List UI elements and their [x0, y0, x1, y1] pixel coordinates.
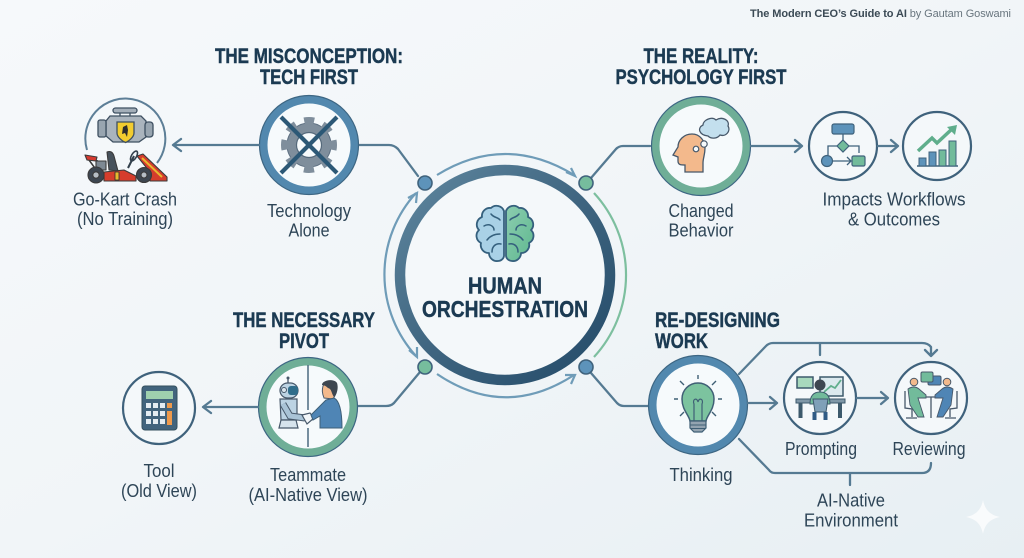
label — [804, 490, 898, 530]
label: (AI-Native View) — [248, 484, 368, 505]
orbit arrow: top — [437, 154, 574, 175]
junction node: top right — [579, 176, 593, 190]
label: Alone — [288, 220, 330, 240]
heading: PSYCHOLOGY FIRST — [616, 66, 787, 89]
icon: head with thought — [652, 96, 750, 196]
label: (Old View) — [121, 480, 197, 501]
credit line: The Modern CEO’s Guide to AI by Gautam Goswami — [750, 8, 1011, 20]
heading: RE-DESIGNING — [655, 309, 780, 332]
label: Changed — [668, 200, 734, 221]
arrow: to outcomes — [878, 140, 898, 152]
label: AI-Native — [817, 490, 885, 510]
label: Technology — [267, 200, 352, 221]
icon: robot and human handshake — [258, 358, 358, 456]
hub title line two: ORCHESTRATION — [422, 296, 588, 322]
orbit arrow: left down head — [409, 347, 417, 357]
junction node: top left — [418, 176, 432, 190]
label: Environment — [804, 510, 898, 530]
label: (No Training) — [77, 208, 173, 229]
icon: calculator — [123, 372, 195, 444]
junction node: bottom left — [418, 360, 432, 374]
icon: corner sparkle — [966, 500, 1000, 534]
icon: crossed-out gear — [260, 96, 358, 194]
panel: go-kart crash — [73, 99, 177, 229]
heading — [233, 309, 375, 353]
central hub — [384, 154, 626, 397]
icon: reviewing meeting — [895, 362, 967, 434]
label: & Outcomes — [848, 208, 940, 230]
connector: AI-native environment bracket — [739, 439, 931, 485]
connector: reality to hub — [591, 146, 650, 178]
orbit arrow: bottom head — [565, 375, 575, 384]
junction node: bottom right — [579, 360, 593, 374]
arrow: thinking over to reviewing — [739, 343, 937, 374]
heading — [616, 45, 787, 89]
orbit arrow: left up head — [408, 193, 417, 203]
connector: re-designing to hub — [591, 373, 648, 406]
label: Teammate — [270, 464, 346, 485]
label — [248, 464, 368, 505]
icon: engine and kart — [85, 99, 167, 183]
label — [121, 460, 197, 501]
arrow: to workflows — [751, 140, 802, 152]
orbit arrow: bottom — [437, 374, 574, 397]
orbit arrow: left upper and lower — [384, 193, 416, 356]
heading: TECH FIRST — [260, 66, 358, 89]
arrow: to tool — [203, 401, 258, 413]
arrow: to go-kart — [173, 139, 259, 151]
label: Thinking — [670, 464, 732, 485]
label: Behavior — [668, 220, 734, 240]
panel: tool — [121, 372, 197, 501]
label — [73, 188, 177, 229]
orbit arrow: top head — [566, 168, 575, 176]
icon: growth chart — [903, 112, 971, 180]
icon: prompting desk — [784, 362, 856, 434]
hub title: HUMAN — [468, 272, 542, 298]
label — [822, 188, 966, 230]
panel: the reality — [616, 45, 971, 240]
connector: pivot to hub — [358, 372, 420, 406]
heading: PIVOT — [279, 330, 329, 353]
heading — [655, 309, 780, 353]
panel: the necessary pivot — [203, 309, 375, 505]
panel: re-designing work — [648, 309, 967, 530]
label — [267, 200, 352, 240]
orbit arc: right green — [594, 193, 626, 357]
arrow: thinking to prompting — [748, 397, 777, 409]
heading: THE NECESSARY — [233, 309, 375, 332]
panel: the misconception — [173, 45, 403, 240]
arrow: prompting to reviewing — [857, 392, 888, 404]
heading — [215, 45, 403, 89]
icon: workflow — [809, 112, 877, 180]
label: Go-Kart Crash — [73, 188, 177, 210]
label — [668, 200, 734, 240]
label: Tool — [144, 460, 174, 481]
heading: WORK — [655, 330, 708, 353]
label: Impacts Workflows — [822, 188, 966, 210]
label: Reviewing — [892, 438, 966, 459]
heading: THE REALITY: — [644, 45, 758, 68]
heading: THE MISCONCEPTION: — [215, 45, 403, 68]
connector: misconception to hub — [358, 145, 418, 176]
label: Prompting — [785, 438, 857, 459]
icon: light bulb — [648, 356, 748, 454]
icon: brain — [477, 206, 533, 261]
